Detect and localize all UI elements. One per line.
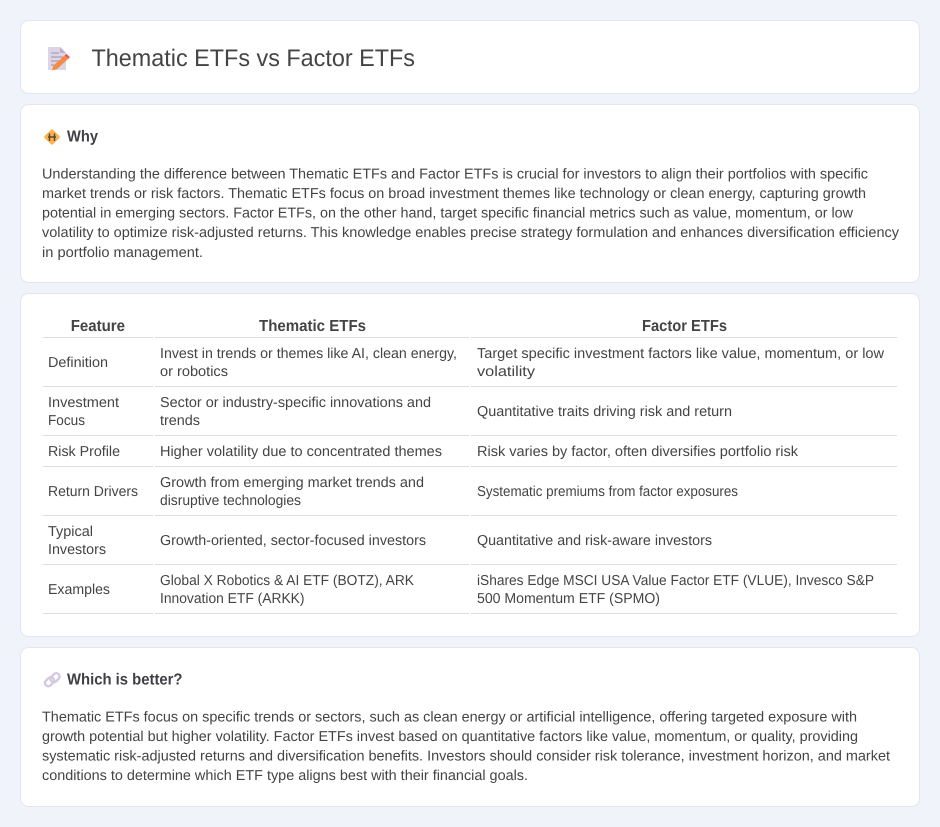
row: examples	[48, 573, 874, 607]
text block: which is better paragraph	[42, 710, 890, 784]
row: return drivers: Systematic premiums from factor exposures	[477, 484, 738, 500]
row: examples: iShares Edge MSCI USA Value Factor ETF (VLUE), Invesco S&P	[477, 573, 874, 589]
row: return drivers: disruptive technologies	[160, 493, 301, 509]
icon: link	[44, 672, 61, 688]
heading: why: Why	[67, 128, 98, 146]
text block: which is better paragraph: growth potential but higher volatility. Factor ETFs invest based on quantitative factors like value, momentum, or quality, providing	[42, 729, 858, 745]
text block: why paragraph: Understanding the difference between Thematic ETFs and Factor ETFs is crucial for investors to align their portfolios with specific	[42, 166, 868, 182]
table header: Thematic ETFs	[259, 318, 366, 335]
row: typical investors	[48, 524, 712, 558]
row: return drivers: Return Drivers	[48, 484, 138, 500]
row: definition	[48, 346, 885, 380]
text block: which is better paragraph: conditions to determine which ETF type aligns best with their financial goals.	[42, 768, 528, 784]
row: investment focus: Focus	[48, 413, 85, 429]
row: definition: Definition	[48, 355, 108, 371]
panel: which is better	[20, 648, 920, 806]
row: return drivers	[48, 475, 738, 509]
row: examples: Innovation ETF (ARKK)	[160, 591, 304, 607]
row: risk profile: Higher volatility due to concentrated themes	[160, 444, 442, 460]
heading: which is better: Which is better?	[67, 672, 182, 688]
row: definition: volatility	[477, 364, 536, 380]
panel: header	[20, 20, 920, 94]
row: typical investors: Quantitative and risk-aware investors	[477, 533, 712, 549]
text block: why paragraph: market trends or risk factors. Thematic ETFs focus on broad investment themes like technology or clean energy, capturing growth	[42, 186, 866, 202]
text block: why paragraph: potential in emerging sectors. Factor ETFs, on the other hand, target specific financial metrics such as value, momentum, or low	[42, 206, 854, 222]
row: definition: or robotics	[160, 364, 228, 380]
row: definition: Invest in trends or themes like AI, clean energy,	[160, 346, 457, 362]
text block: which is better paragraph: systematic risk-adjusted returns and diversification benefits. Investors should consider risk tolerance, investment horizon, and market	[42, 748, 890, 764]
row: investment focus: Quantitative traits driving risk and return	[477, 404, 732, 420]
row: typical investors: Investors	[48, 542, 106, 558]
table header	[71, 318, 727, 335]
row: examples: 500 Momentum ETF (SPMO)	[477, 591, 660, 607]
text block: why paragraph: in portfolio management.	[42, 245, 203, 261]
text block: why paragraph: volatility to optimize risk-adjusted returns. This knowledge enables precise strategy formulation and enhances diversification efficiency	[42, 225, 900, 241]
row: typical investors: Growth-oriented, sector-focused investors	[160, 533, 426, 549]
table header: Factor ETFs	[642, 318, 727, 335]
row: examples: Examples	[48, 582, 110, 598]
row: investment focus: Sector or industry-specific innovations and	[160, 395, 431, 411]
row: investment focus: trends	[160, 413, 200, 429]
row: return drivers: Growth from emerging market trends and	[160, 475, 424, 491]
title: Thematic ETFs vs Factor ETFs	[92, 45, 415, 72]
panel: why	[20, 104, 920, 282]
row: risk profile: Risk Profile	[48, 444, 120, 460]
text block: why paragraph	[42, 166, 900, 261]
table header: Feature	[71, 318, 125, 335]
row: definition: Target specific investment factors like value, momentum, or low	[477, 346, 885, 362]
icon: document with pencil	[48, 47, 70, 70]
row: examples: Global X Robotics & AI ETF (BOTZ), ARK	[160, 573, 414, 589]
row: risk profile	[48, 444, 799, 460]
row: investment focus: Investment	[48, 395, 119, 411]
row: investment focus	[48, 395, 732, 429]
row: typical investors: Typical	[48, 524, 93, 540]
panel: comparison table	[20, 294, 920, 636]
icon: diamond sign	[44, 129, 60, 145]
row: risk profile: Risk varies by factor, often diversifies portfolio risk	[477, 444, 799, 460]
text block: which is better paragraph: Thematic ETFs focus on specific trends or sectors, such as clean energy or artificial intelligence, offering targeted exposure with	[42, 710, 857, 726]
